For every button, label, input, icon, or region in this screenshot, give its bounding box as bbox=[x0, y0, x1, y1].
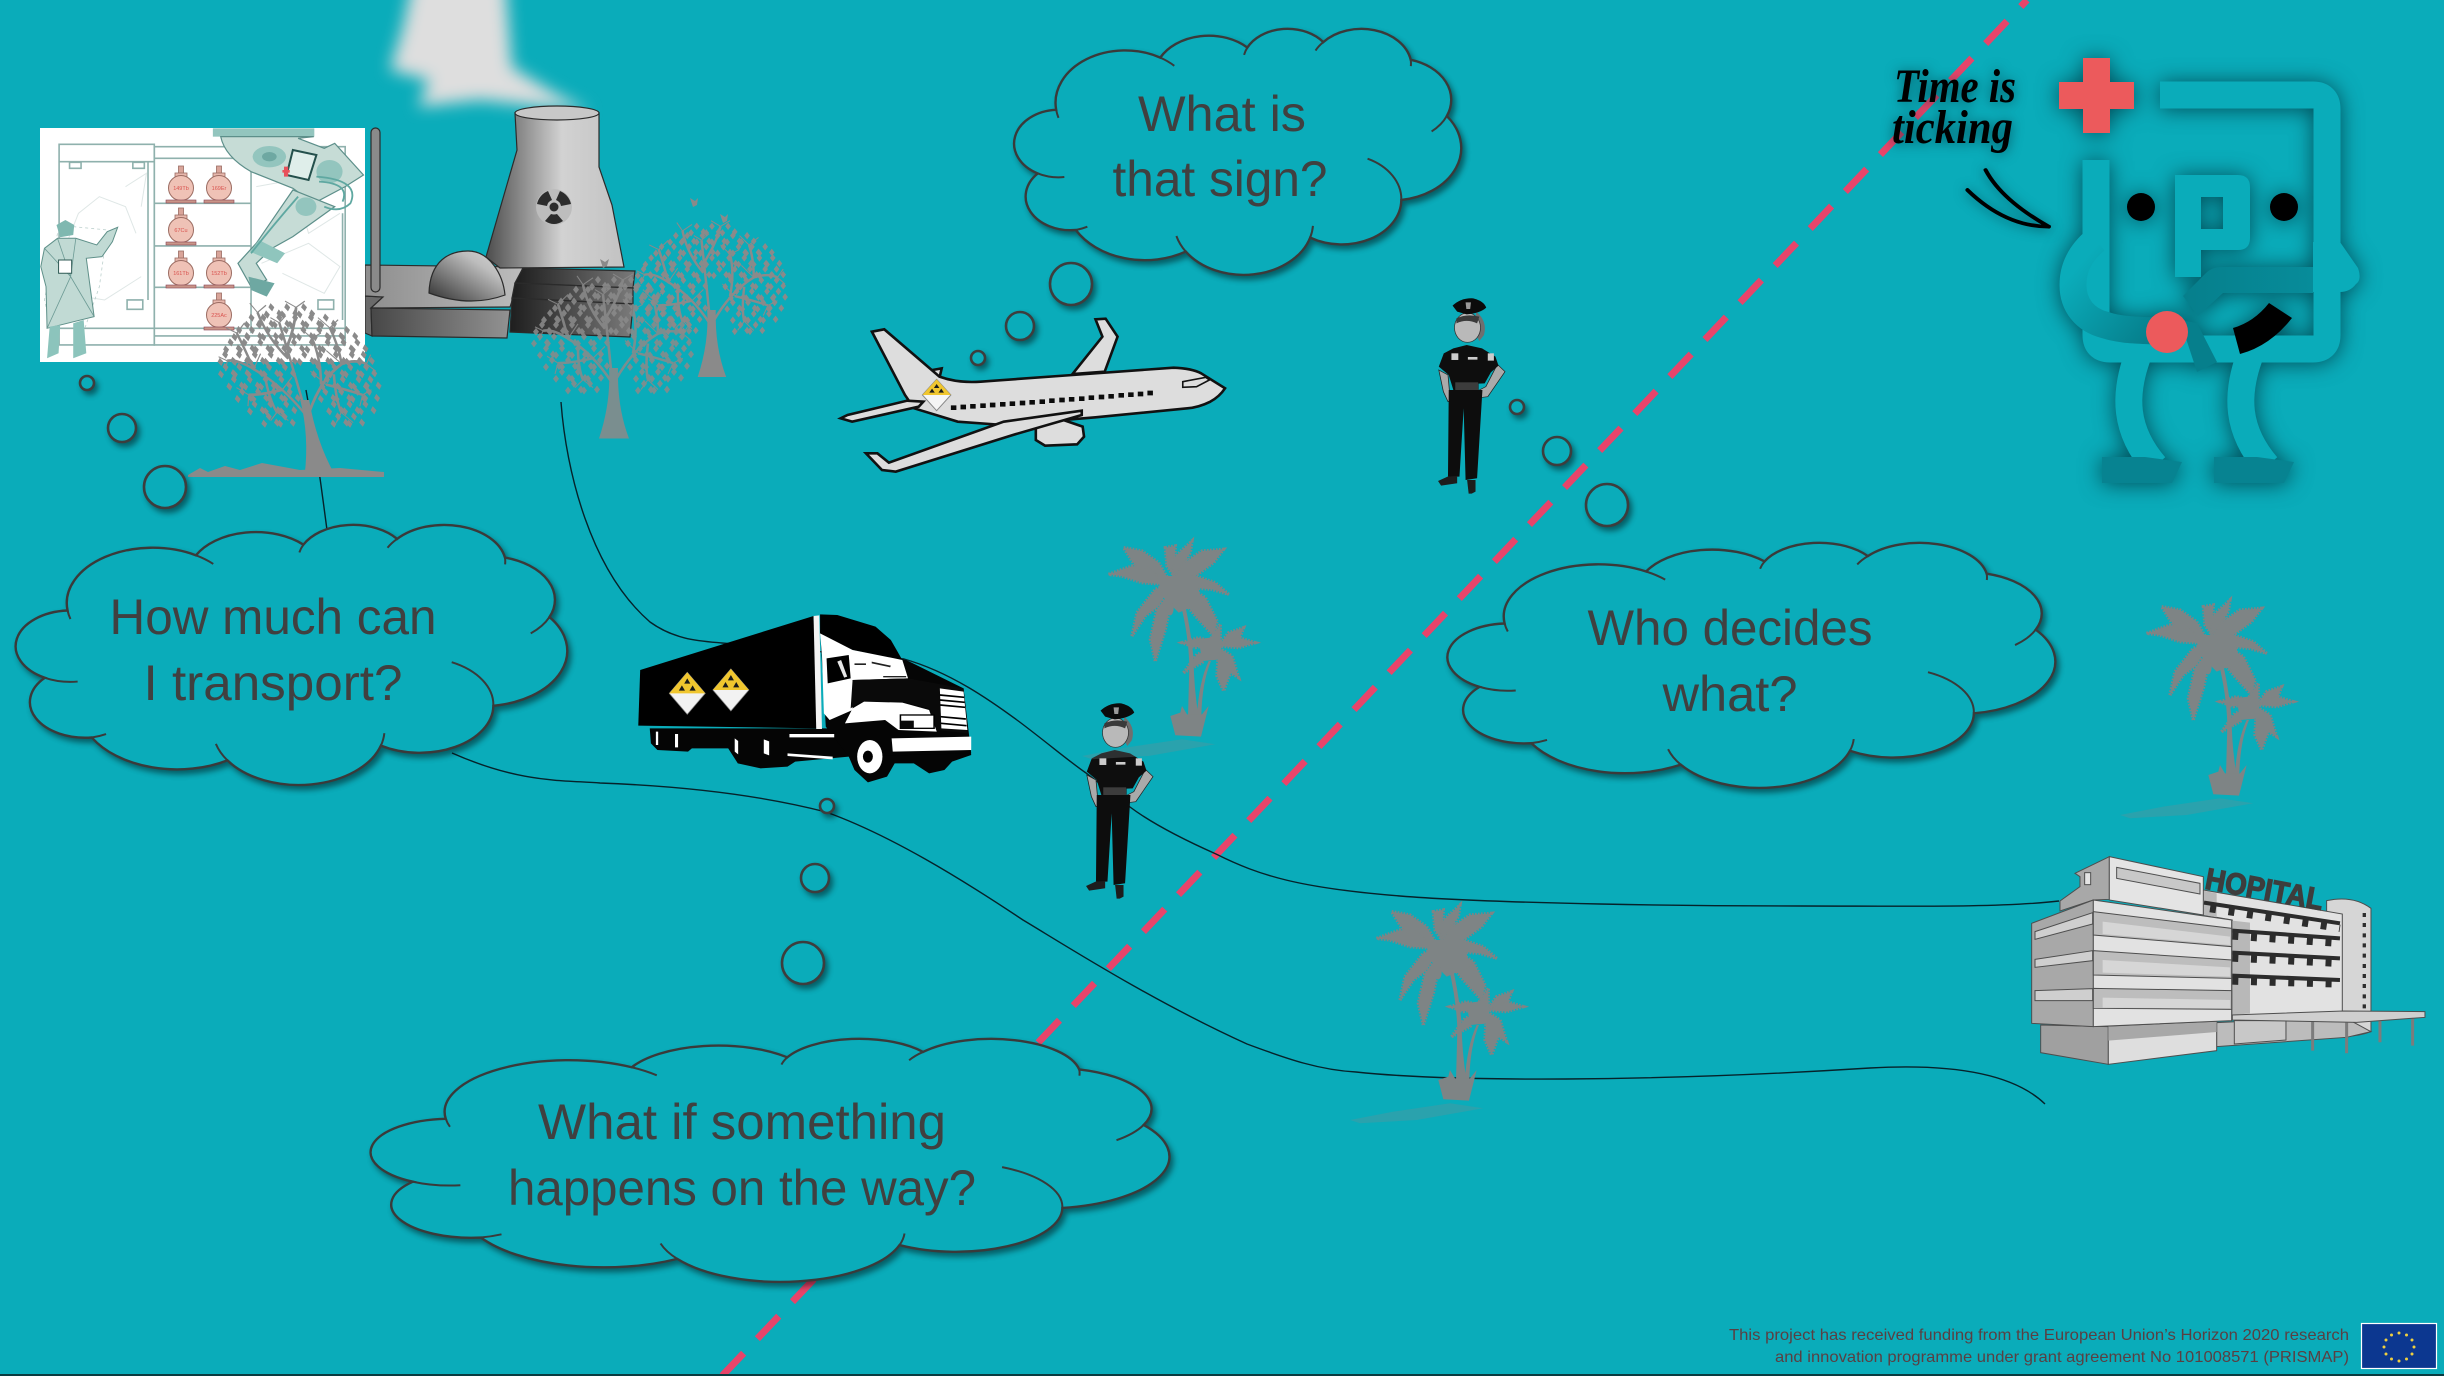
base platform top bbox=[365, 265, 523, 308]
faint map outline bbox=[63, 173, 340, 300]
main block front bbox=[2093, 900, 2232, 1027]
upper front block bbox=[2060, 857, 2109, 911]
time is ticking note bbox=[1892, 60, 2049, 227]
white panel: radiopharmacy cabinet with robot arm bbox=[40, 128, 365, 362]
cloud: what if something happens: What if something bbox=[538, 1094, 946, 1150]
antenna bbox=[371, 128, 380, 292]
radiation symbol bbox=[536, 189, 572, 225]
tree behind plant, right bbox=[633, 221, 788, 377]
canopy posts bbox=[2313, 1018, 2413, 1053]
sign: HOPITAL bbox=[2203, 863, 2326, 917]
cloud: who decides what: Who decides bbox=[1588, 600, 1872, 656]
base platform front bbox=[371, 308, 510, 338]
hand strap bbox=[2180, 320, 2217, 372]
ground floor bbox=[2217, 1017, 2371, 1047]
cloud: how much can I transport: I transport? bbox=[144, 655, 402, 711]
robot arm bbox=[213, 128, 314, 137]
cabin windows bbox=[951, 391, 1153, 410]
right arm bbox=[2183, 267, 2313, 316]
EU flag bbox=[2362, 1324, 2436, 1368]
radionuclide vials: 149Tb bbox=[173, 186, 189, 192]
palm tree right bbox=[2120, 600, 2293, 818]
radionuclide vials: 152Tb bbox=[211, 271, 227, 277]
police officer, upper bbox=[1438, 298, 1505, 494]
radionuclide vials bbox=[166, 166, 234, 330]
radioactive placard bbox=[922, 379, 951, 411]
tower rim bbox=[515, 106, 599, 120]
truck bbox=[638, 614, 971, 782]
feet bbox=[2102, 457, 2182, 483]
tree in front of plant bbox=[531, 274, 694, 439]
main block side bbox=[2032, 900, 2093, 1027]
police officer, lower bbox=[1086, 703, 1153, 899]
reactor dome bbox=[429, 251, 505, 301]
base platform left edge bbox=[365, 296, 383, 336]
left arm bbox=[2073, 240, 2155, 331]
right shoulder bbox=[2313, 242, 2360, 292]
upper rear block bbox=[2203, 890, 2342, 1017]
funding statement: This project has received funding from the European Union’s Horizon 2020 research bbox=[1729, 1327, 2349, 1344]
smile bbox=[2233, 303, 2292, 354]
palm tree upper centre bbox=[1082, 541, 1255, 759]
base bbox=[2041, 1025, 2108, 1064]
trailer bbox=[638, 616, 820, 728]
dark building bbox=[515, 268, 635, 288]
nuclear power plant bbox=[365, 106, 635, 338]
body outline bbox=[2096, 95, 2327, 349]
eyes bbox=[2127, 193, 2155, 221]
thought bubbles, left cloud bbox=[80, 376, 186, 508]
funding statement: and innovation programme under grant agreement No 101008571 (PRISMAP) bbox=[1775, 1349, 2349, 1366]
tree over panel with grass bbox=[188, 301, 399, 477]
chassis bbox=[650, 723, 971, 782]
cab fairing bbox=[820, 614, 902, 660]
legs bbox=[2129, 358, 2155, 466]
cloud: how much can I transport bbox=[16, 525, 567, 785]
red hand bbox=[2146, 311, 2188, 353]
cloud: what if something happens: happens on the way? bbox=[508, 1160, 976, 1216]
wheels bbox=[857, 740, 882, 773]
thought bubbles, top cloud bbox=[971, 263, 1092, 365]
cloud: what is that sign: that sign? bbox=[1112, 151, 1328, 207]
cooling tower bbox=[486, 113, 624, 268]
time is ticking note: Time is bbox=[1894, 60, 2016, 113]
letter P bbox=[2175, 175, 2250, 277]
red cross bbox=[2059, 58, 2134, 133]
speech marks bbox=[1967, 170, 2049, 227]
hospital building bbox=[2032, 857, 2425, 1064]
cloud: who decides what: what? bbox=[1661, 666, 1798, 722]
mascot character bbox=[2059, 58, 2360, 483]
thin route lines bbox=[306, 390, 2059, 1104]
technician figure bbox=[41, 220, 118, 358]
radionuclide vials: 225Ac bbox=[211, 313, 227, 319]
time is ticking note: ticking bbox=[1892, 101, 2013, 154]
cloud: what is that sign bbox=[1014, 29, 1461, 275]
thought bubbles, right cloud bbox=[1510, 400, 1628, 526]
cloud: how much can I transport: How much can bbox=[110, 589, 436, 645]
grille bbox=[940, 688, 967, 730]
bumper bbox=[892, 737, 971, 752]
radionuclide vials: 161Tb bbox=[173, 271, 189, 277]
tower bbox=[2327, 899, 2371, 1037]
thought bubbles, bottom cloud bbox=[782, 799, 834, 984]
cloud: what is that sign: What is bbox=[1138, 86, 1306, 142]
cabinet frame bbox=[59, 144, 345, 345]
funding statement bbox=[1729, 1327, 2349, 1366]
window bands bbox=[2204, 903, 2340, 984]
radionuclide vials: 67Cu bbox=[174, 228, 188, 234]
radionuclide vials: 169Er bbox=[212, 186, 227, 192]
cloud: who decides what bbox=[1447, 543, 2055, 788]
birds bbox=[600, 198, 728, 268]
cloud: what if something happens bbox=[371, 1039, 1169, 1282]
cab body bbox=[820, 633, 908, 720]
dashed red route line bbox=[722, 0, 2027, 1376]
canopy bbox=[2232, 1011, 2425, 1022]
hazard placards bbox=[669, 672, 705, 714]
palm tree lower centre bbox=[1350, 905, 1523, 1123]
airplane bbox=[841, 319, 1225, 472]
cab black base bbox=[820, 630, 971, 757]
smoke plume bbox=[390, 0, 590, 112]
